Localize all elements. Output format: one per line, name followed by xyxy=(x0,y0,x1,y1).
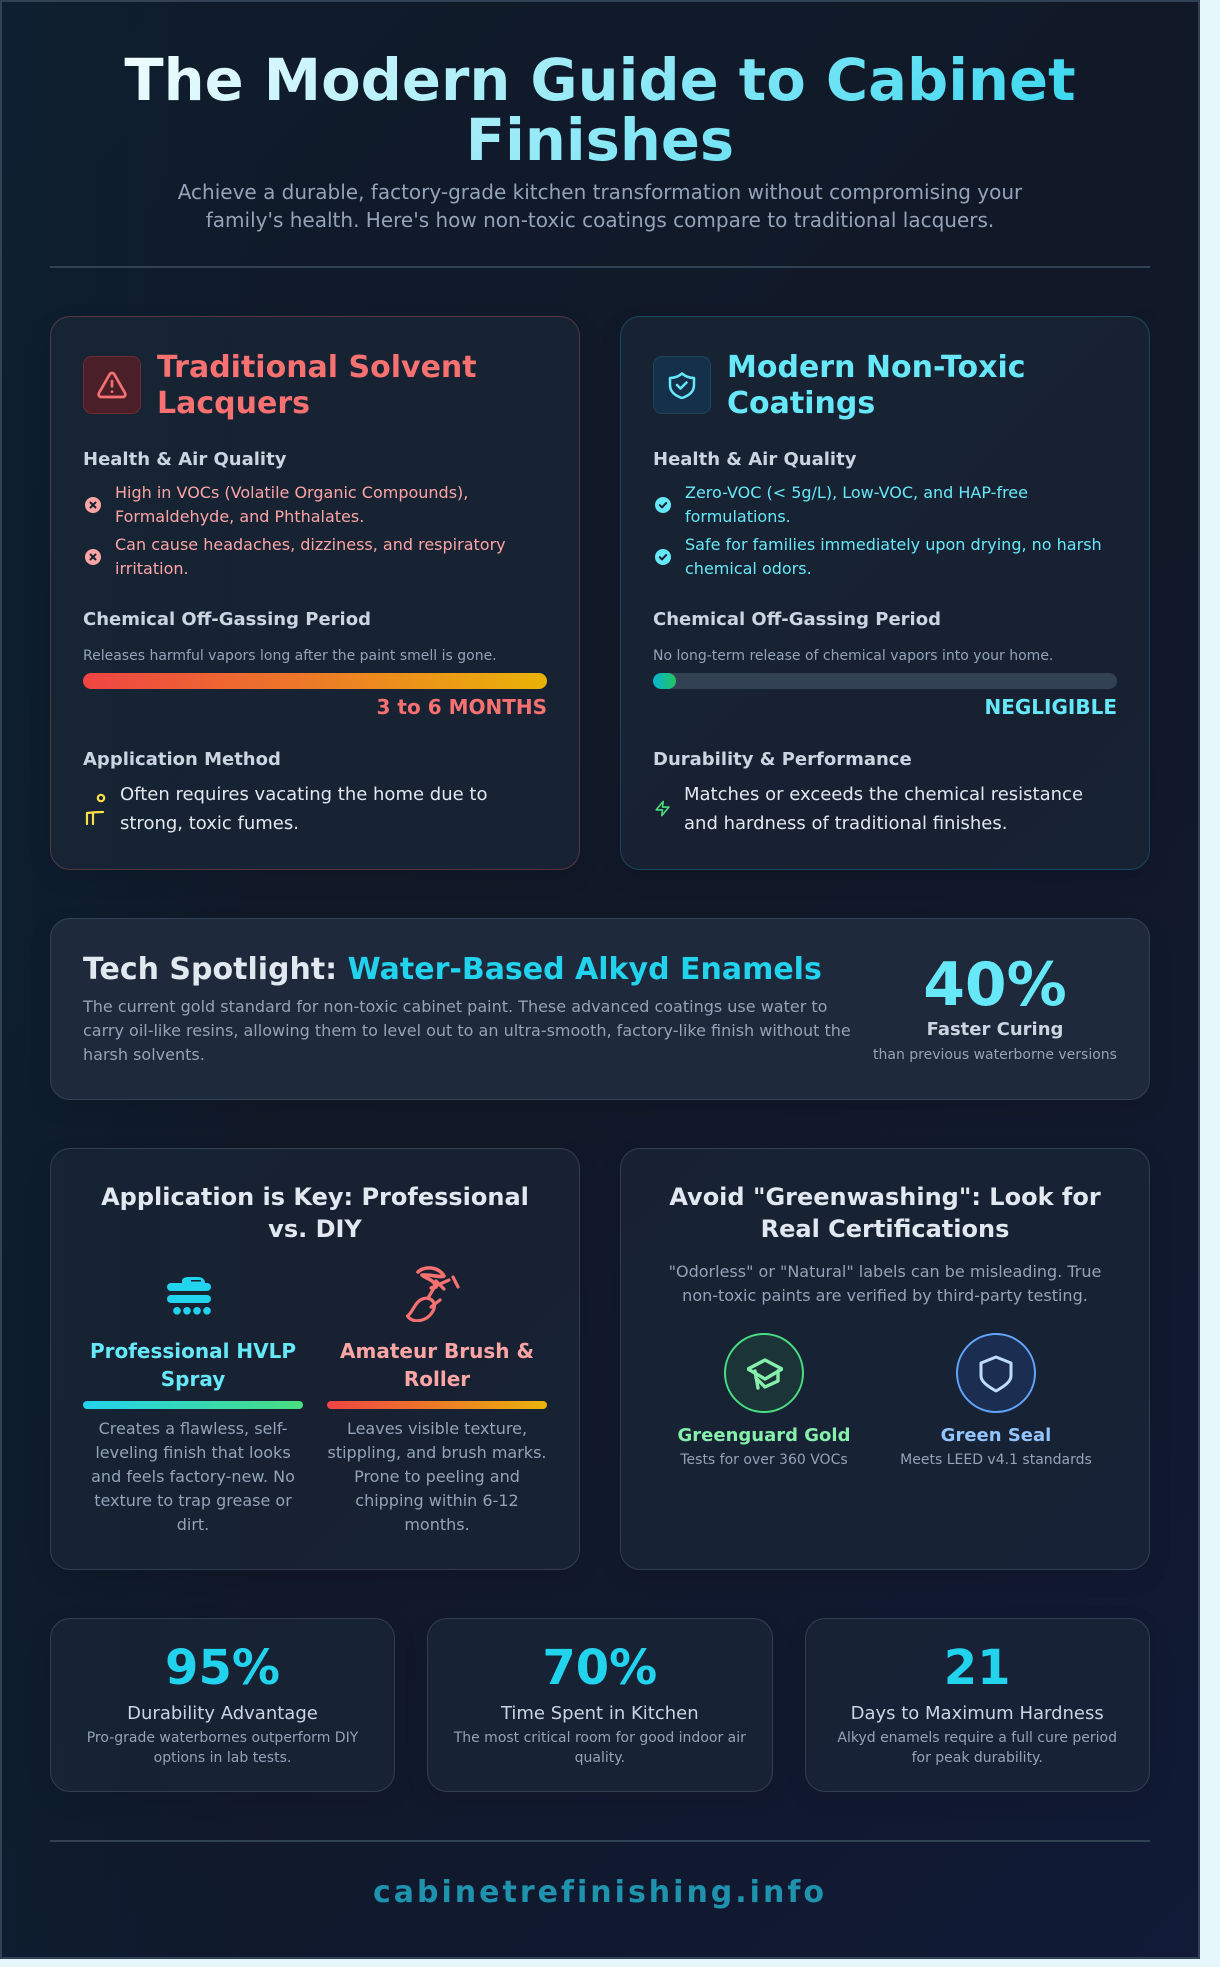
column text: leveling finish that looks xyxy=(95,1443,291,1462)
description: The most critical room for good indoor air xyxy=(454,1730,746,1746)
column: amateur brush xyxy=(327,1266,547,1534)
footer: website: cabinetrefinishing.info xyxy=(373,1875,827,1910)
column text xyxy=(327,1419,546,1534)
column title: Professional HVLP xyxy=(90,1339,296,1363)
label: Days to Maximum Hardness xyxy=(851,1702,1104,1724)
column text: Leaves visible texture, xyxy=(347,1419,527,1438)
heading: modern: Coatings xyxy=(727,386,875,421)
durability text: Matches or exceeds the chemical resistance xyxy=(684,784,1083,805)
subtitle: Achieve a durable, factory-grade kitchen transformation without compromising your xyxy=(178,180,1022,204)
heading: application xyxy=(101,1183,529,1243)
stat card: days to hardness xyxy=(805,1618,1150,1792)
description: options in lab tests. xyxy=(154,1750,291,1766)
application text xyxy=(120,784,487,834)
panel: certifications xyxy=(620,1148,1150,1570)
icon: shield check xyxy=(653,356,711,414)
application text: Often requires vacating the home due to xyxy=(120,784,487,805)
bullet: headaches: Can cause headaches, dizziness, and respiratory xyxy=(115,535,506,554)
bullet: safe for families: Safe for families immediately upon drying, no harsh xyxy=(685,535,1102,554)
column text: dirt. xyxy=(177,1515,209,1534)
heading: modern xyxy=(727,350,1026,421)
panel: tech spotlight xyxy=(50,918,1150,1100)
value: 3 to 6 months: 3 to 6 MONTHS xyxy=(377,695,547,719)
bullet: VOCs: High in VOCs (Volatile Organic Compounds), xyxy=(115,483,468,502)
bar: off-gassing 3 to 6 months xyxy=(83,673,547,689)
heading: traditional: Traditional Solvent xyxy=(157,350,477,385)
spotlight description: harsh solvents. xyxy=(83,1045,205,1064)
spotlight description: carry oil-like resins, allowing them to level out to an ultra-smooth, factory-like finish without the xyxy=(83,1021,851,1040)
section heading: off-gassing: Chemical Off-Gassing Period xyxy=(653,608,941,630)
gradient bar xyxy=(83,1401,303,1409)
number: 95% xyxy=(165,1640,280,1696)
description xyxy=(87,1730,358,1766)
stat label: Faster Curing xyxy=(927,1019,1063,1040)
section heading: health: Health & Air Quality xyxy=(653,448,856,470)
column title: Amateur Brush & xyxy=(340,1339,534,1363)
section heading: durability: Durability & Performance xyxy=(653,748,912,770)
column text: texture to trap grease or xyxy=(94,1491,292,1510)
off-gassing note: No long-term release of chemical vapors into your home. xyxy=(653,648,1053,664)
title: The Modern Guide to Cabinet xyxy=(124,47,1076,114)
number: 70% xyxy=(542,1640,657,1696)
column text: Creates a flawless, self- xyxy=(99,1419,287,1438)
panel: application is key xyxy=(50,1148,580,1570)
column title: Roller xyxy=(404,1367,470,1391)
number: 21 xyxy=(944,1640,1011,1696)
heading: greenwashing xyxy=(669,1183,1101,1243)
column text xyxy=(91,1419,295,1534)
description: quality. xyxy=(575,1750,625,1766)
bullet: headaches xyxy=(85,535,506,578)
value: negligible: NEGLIGIBLE xyxy=(984,695,1117,719)
description: Pro-grade waterbornes outperform DIY xyxy=(87,1730,358,1746)
section heading: application: Application Method xyxy=(83,748,281,770)
application text: strong, toxic fumes. xyxy=(120,813,299,834)
certification note: Tests for over 360 VOCs xyxy=(680,1452,848,1468)
certification note: Meets LEED v4.1 standards xyxy=(900,1452,1092,1468)
heading: modern: Modern Non-Toxic xyxy=(727,350,1026,385)
spotlight description: The current gold standard for non-toxic cabinet paint. These advanced coatings use water to xyxy=(83,997,827,1016)
bullet: zero VOC: formulations. xyxy=(685,507,791,526)
bullet: safe for families xyxy=(655,535,1102,578)
heading: application: Application is Key: Professional xyxy=(101,1183,529,1211)
bullet: VOCs xyxy=(85,483,468,526)
certification: greenguard gold xyxy=(678,1333,850,1468)
heading: traditional xyxy=(157,350,477,421)
description xyxy=(837,1730,1117,1766)
column title: Spray xyxy=(161,1367,225,1391)
column text: stippling, and brush marks. xyxy=(327,1443,546,1462)
icon: person xyxy=(86,794,106,826)
panel: modern non-toxic coatings xyxy=(620,316,1150,870)
bullet: VOCs: Formaldehyde, and Phthalates. xyxy=(115,507,364,526)
stat note: than previous waterborne versions xyxy=(873,1046,1117,1062)
certification: green seal xyxy=(900,1333,1092,1468)
spotlight description xyxy=(82,997,851,1064)
column title xyxy=(340,1339,534,1391)
heading: tech spotlight: Tech Spotlight: Water-Based Alkyd Enamels xyxy=(83,952,822,987)
certifications intro xyxy=(669,1262,1101,1304)
column text: and feels factory-new. No xyxy=(91,1467,295,1486)
bullet: safe for families: chemical odors. xyxy=(685,559,812,578)
certification name: Green Seal xyxy=(941,1424,1051,1446)
stat card: time in kitchen xyxy=(427,1618,773,1792)
durability text: and hardness of traditional finishes. xyxy=(684,813,1007,834)
icon: shield badge xyxy=(956,1333,1036,1413)
durability text xyxy=(684,784,1083,834)
bar: off-gassing negligible xyxy=(653,673,1117,689)
column text: months. xyxy=(404,1515,470,1534)
icon: graduation cap badge xyxy=(724,1333,804,1413)
column text: Prone to peeling and xyxy=(354,1467,520,1486)
heading: greenwashing: Real Certifications xyxy=(761,1215,1009,1243)
label: Durability Advantage xyxy=(127,1702,318,1724)
gradient bar xyxy=(327,1401,547,1409)
description: Alkyd enamels require a full cure period xyxy=(837,1730,1117,1746)
bullet: headaches: irritation. xyxy=(115,559,189,578)
bullet: zero VOC: Zero-VOC (< 5g/L), Low-VOC, and HAP-free xyxy=(685,483,1028,502)
bullet: zero VOC xyxy=(655,483,1028,526)
icon: warning triangle xyxy=(83,356,141,414)
subtitle xyxy=(178,180,1022,232)
certification name: Greenguard Gold xyxy=(678,1424,850,1446)
panel: traditional solvent lacquers xyxy=(50,316,580,870)
stat card: durability advantage xyxy=(50,1618,395,1792)
column: professional spray xyxy=(83,1277,303,1534)
section heading: off-gassing: Chemical Off-Gassing Period xyxy=(83,608,371,630)
icon: brush xyxy=(406,1266,460,1322)
subtitle: family's health. Here's how non-toxic coatings compare to traditional lacquers. xyxy=(206,208,994,232)
heading: greenwashing: Avoid "Greenwashing": Look for xyxy=(669,1183,1101,1211)
title: Finishes xyxy=(466,107,734,174)
description: for peak durability. xyxy=(912,1750,1043,1766)
column title xyxy=(90,1339,296,1391)
section heading: health: Health & Air Quality xyxy=(83,448,286,470)
title xyxy=(50,51,1150,171)
stat number: 40% xyxy=(923,950,1067,1020)
heading: application: vs. DIY xyxy=(268,1215,362,1243)
column text: chipping within 6-12 xyxy=(355,1491,519,1510)
description xyxy=(454,1730,746,1766)
certifications intro: non-toxic paints are verified by third-party testing. xyxy=(682,1286,1088,1304)
off-gassing note: Releases harmful vapors long after the paint smell is gone. xyxy=(83,648,497,664)
icon: spray xyxy=(167,1277,211,1315)
heading: traditional: Lacquers xyxy=(157,386,310,421)
icon: lightning bolt xyxy=(655,800,670,816)
stat: 40% faster curing xyxy=(873,950,1117,1062)
certifications intro: "Odorless" or "Natural" labels can be misleading. True xyxy=(669,1262,1101,1280)
label: Time Spent in Kitchen xyxy=(501,1702,699,1724)
